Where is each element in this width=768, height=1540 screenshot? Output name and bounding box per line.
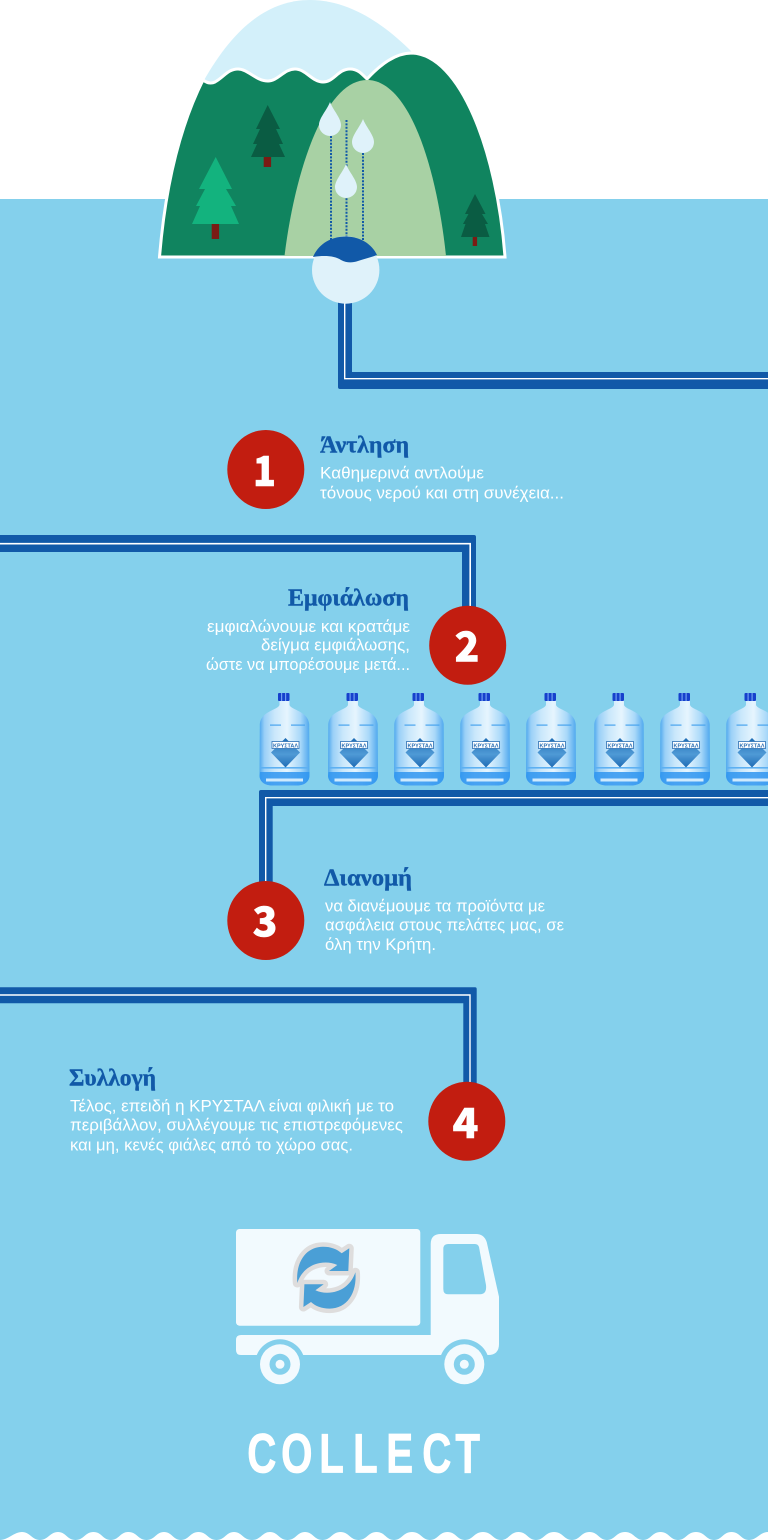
heading: distribution: Διανομή [324, 866, 412, 892]
number badge 2: 2 [454, 614, 480, 674]
text: bottling description [206, 618, 411, 674]
bottle 8 [726, 693, 768, 786]
text: bottling description: εμφιαλώνουμε και κρατάμε [207, 618, 411, 636]
wheel arches [250, 1355, 312, 1385]
text: pumping description: Καθημερινά αντλούμε [320, 464, 485, 482]
heading: collection: Συλλογή [69, 1066, 156, 1092]
text: distribution description: όλη την Κρήτη. [325, 936, 436, 954]
green mountains [160, 53, 505, 257]
tree: light [192, 157, 239, 239]
text: distribution description [325, 898, 565, 954]
water drops [319, 102, 374, 198]
dotted water lines [331, 120, 363, 240]
bottle 1 [260, 693, 310, 786]
heading: pumping: Άντληση [320, 432, 409, 458]
truck box [236, 1229, 420, 1326]
icon: recycle arrows [297, 1247, 356, 1309]
illustration: mountain with spring [160, 0, 505, 257]
step 1: pumping [227, 430, 564, 509]
text: pumping description: τόνους νερού και στη συνέχεια... [320, 484, 564, 502]
number badge 3: 3 [252, 888, 278, 948]
number badge 1 [227, 430, 304, 509]
text: collection description: και μη, κενές φιάλες από το χώρο σας. [70, 1137, 353, 1155]
text: collection description [70, 1098, 403, 1155]
pipe 4 [0, 987, 477, 1100]
spring basin circle [312, 236, 379, 304]
bottle 6 [594, 693, 644, 786]
number badge 2 [429, 606, 506, 685]
number badge 4: 4 [452, 1090, 478, 1150]
text: distribution description: να διανέμουμε τα προϊόντα με [325, 898, 546, 916]
pipe 3 [259, 790, 768, 900]
front wheel [260, 1344, 300, 1384]
step 2: bottling [206, 586, 506, 685]
text: collection description: Τέλος, επειδή η ΚΡΥΣΤΑΛ είναι φιλική με το [70, 1098, 394, 1116]
bottle 4 [460, 693, 510, 786]
tree: dark small [461, 194, 490, 246]
bottle 7 [660, 693, 710, 786]
truck cab and bed [236, 1234, 499, 1355]
bottle 2 [328, 693, 378, 786]
step 3: distribution [227, 866, 565, 960]
heading: bottling: Εμφιάλωση [288, 586, 409, 612]
text: bottling description: ώστε να μπορέσουμε μετά... [206, 656, 410, 674]
pipe 1 [338, 298, 768, 389]
light green hill [284, 80, 446, 256]
tree: dark large [251, 105, 285, 167]
number badge 1: 1 [253, 438, 276, 498]
bottom wave edge [0, 1532, 768, 1540]
label: COLLECT: COLLECT [247, 1423, 480, 1485]
text: bottling description: δείγμα εμφιάλωσης, [261, 637, 410, 655]
step 4: collection [69, 1066, 505, 1161]
number badge 4 [428, 1082, 505, 1161]
row of water bottles [260, 693, 768, 786]
bottle 3 [394, 693, 444, 786]
number badge 3 [227, 881, 304, 960]
snow cap [203, 0, 412, 82]
rear wheel [444, 1344, 484, 1384]
text: collection description: περιβάλλον, συλλέγουμε τις επιστρεφόμενες [70, 1116, 403, 1134]
text: pumping description [320, 464, 564, 502]
pipe 2 [0, 535, 476, 640]
bottle 5 [526, 693, 576, 786]
text: distribution description: ασφάλεια στους πελάτες μας, σε [325, 916, 565, 934]
icon: delivery truck [236, 1229, 499, 1389]
cab window [443, 1244, 486, 1294]
